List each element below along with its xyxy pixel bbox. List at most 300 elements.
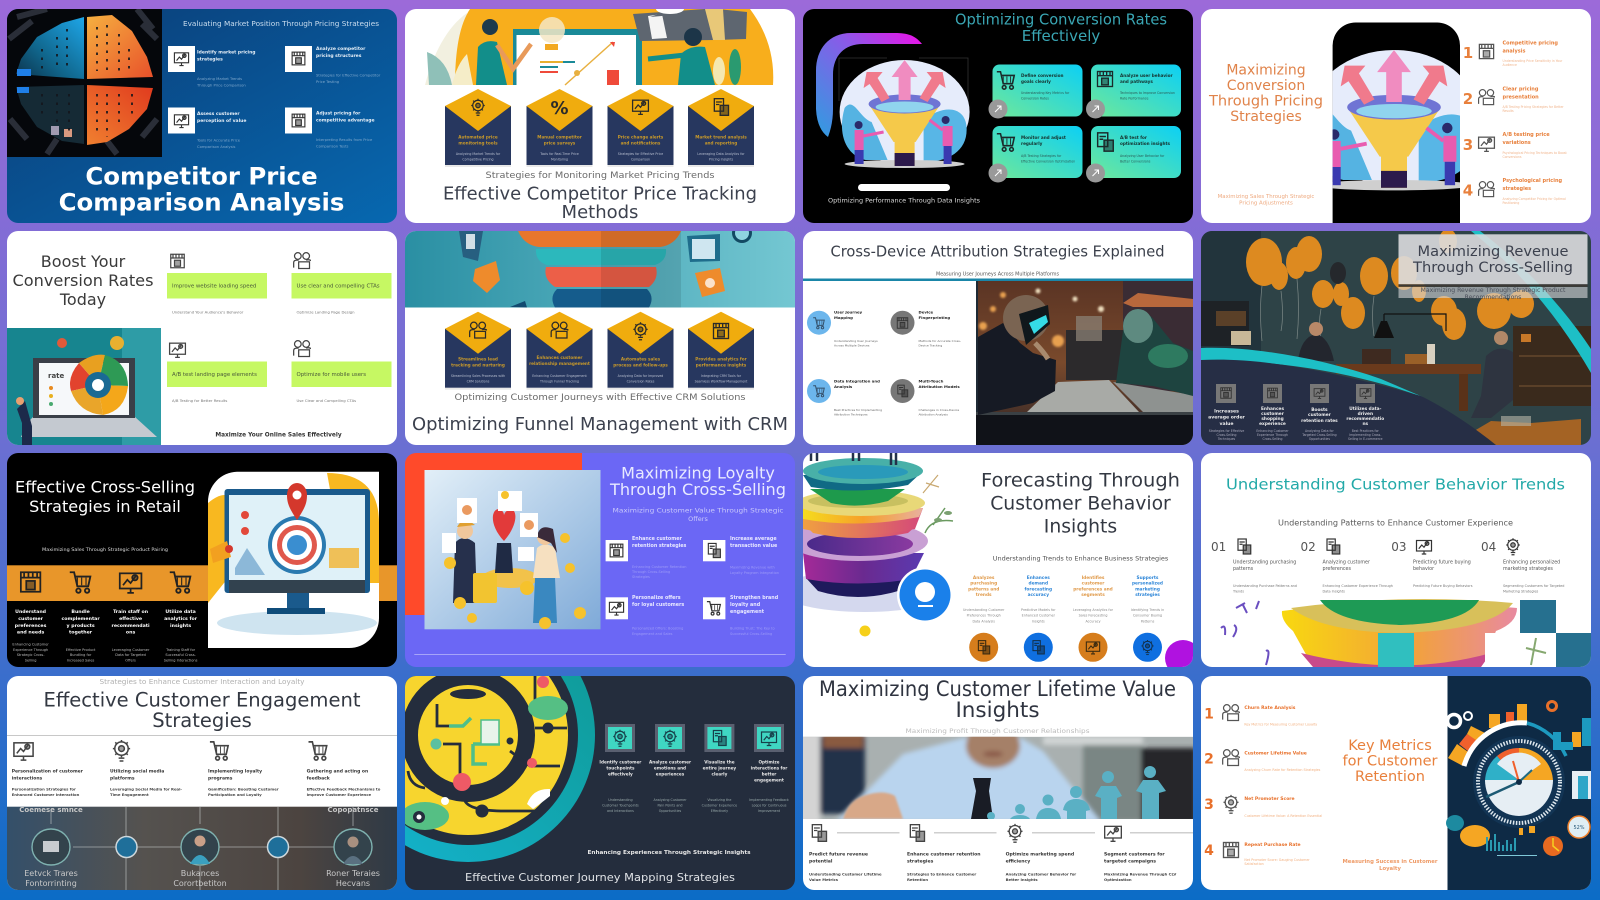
step: Analyze customer emotions and experiences <box>649 724 692 813</box>
metric 3: Net Promoter Score: 3 <box>1204 797 1214 813</box>
item: Enhance customer retention strategies: Strategies <box>632 575 650 579</box>
metric 1: Churn Rate Analysis: Key Metrics for Measuring Customer Loyalty <box>1244 722 1317 726</box>
panel: Effective Customer Engagement Strategies <box>7 676 397 890</box>
title: Strategies <box>152 709 252 732</box>
title: Through Cross-Selling <box>609 480 786 499</box>
column: Supports personalized marketing strategies: marketing <box>1135 586 1160 592</box>
tile: Define conversion goals clearly: goals clearly <box>1021 79 1051 84</box>
step: Utilize data analytics for insights <box>164 572 198 662</box>
item: Increases average order value: Techniques <box>1217 437 1235 441</box>
item: User Journey Mapping: Understanding User Journeys <box>834 339 878 343</box>
step: Utilize data analytics for insights: Training Staff for <box>165 648 196 652</box>
item: Increases average order value: average order <box>1208 414 1246 420</box>
icon card: Price change alerts and notifications: Price change alerts <box>618 134 664 140</box>
step: Bundle complementary products together <box>62 572 100 662</box>
step: Identify customer touchpoints effectively: touchpoints <box>606 766 635 770</box>
step: Optimize interactions for better engagement: Optimize <box>758 760 780 764</box>
caption: Optimizing Performance Through Data Insights <box>828 198 980 204</box>
footer caption: Maximize Your Online Sales Effectively <box>215 432 342 438</box>
item: A/B test landing page elements: A/B test landing page elements <box>172 372 257 378</box>
item: Strengthen brand loyalty and engagement: Building Trust: The Key to <box>730 626 775 630</box>
item: Enhance customer retention strategies: strategies <box>907 858 934 864</box>
step: Optimize interactions for better engagement <box>749 724 789 813</box>
item: Device Fingerprinting: Fingerprinting <box>918 315 950 320</box>
image: connected customer network diagram: Corortbetiton <box>173 879 227 888</box>
icon card: Manual competitor price surveys: price surveys <box>544 140 576 146</box>
panel: Effective Competitor Price Tracking Methods <box>405 4 795 223</box>
icon card: Manual competitor price surveys: Manual competitor <box>537 134 583 140</box>
icon card: Enhances customer relationship management: Through Funnel Tracking <box>539 380 579 384</box>
step: Visualize the entire journey clearly: Visualize the <box>704 760 735 764</box>
teal corner curve <box>1471 231 1591 373</box>
item: Enhance customer retention strategies: retention strategies <box>632 543 687 549</box>
icon card: Market trend analysis and reporting: Leveraging Data Analytics for <box>697 152 745 156</box>
item 3: A/B testing price variations: 3 <box>1463 136 1473 154</box>
step: Visualize the entire journey clearly <box>702 724 737 813</box>
item: Enhances customer shopping experience: experience <box>1259 421 1286 427</box>
column: Identifies customer preferences and segments: Identifies <box>1082 575 1105 581</box>
icon card: Manual competitor price surveys: Monitoring <box>551 158 568 162</box>
step: Bundle complementary products together: together <box>69 630 93 636</box>
item: Personalization of customer interactions <box>12 743 84 797</box>
item: Boosts customer retention rates: Analyzing Data for <box>1305 429 1334 433</box>
step: Utilize data analytics for insights: Utilize data <box>165 609 196 615</box>
item: Utilizes data-driven recommendations: Implementing Cross- <box>1349 433 1381 437</box>
icon card: Automates sales process and follow-ups: Conversion Rates <box>627 380 655 384</box>
item: Use clear and compelling CTAs: Use clear and compelling CTAs <box>296 284 380 290</box>
caption: Loyalty <box>1379 866 1401 872</box>
step 01 <box>1211 539 1297 594</box>
step 04: Segmenting Customers for Targeted <box>1503 584 1564 588</box>
item: Predict future revenue potential: potential <box>809 858 833 864</box>
column: Supports personalized marketing strategies <box>1131 575 1164 662</box>
item: Optimize marketing spend efficiency: Optimize marketing spend <box>1006 852 1074 858</box>
item: Implementing loyalty programs: Participation and Loyalty <box>208 792 262 797</box>
item: Increases average order value <box>1208 384 1246 441</box>
item: Assess customer perception of value: Comparison Analysis <box>197 145 236 149</box>
item: Multi-Touch Attribution Models: Challenges in Cross-Device <box>918 408 959 412</box>
icon card: Streamlines lead tracking and nurturing <box>445 312 511 390</box>
title: Key Metrics <box>1348 738 1432 754</box>
title: Conversion Rates <box>12 271 154 290</box>
illustration: circular journey map <box>341 608 595 862</box>
item: Assess customer perception of value <box>168 108 246 149</box>
tile: Monitor and adjust regularly: Effective Conversion Optimization <box>1021 160 1075 164</box>
item: Multi-Touch Attribution Models: Attribution Models <box>918 384 960 389</box>
step 02 <box>1300 539 1393 594</box>
subtitle: Measuring User Journeys Across Multiple Platforms <box>936 272 1059 278</box>
item 4: Psychological pricing strategies: Analyzing Competitor Pricing for Optimal <box>1502 197 1566 201</box>
item: Increases average order value: Increases <box>1214 408 1239 414</box>
item: Utilizing social media platforms <box>110 740 182 797</box>
step: Bundle complementary products together: y products <box>67 623 95 629</box>
item 2: Clear pricing presentation: Results <box>1502 109 1514 113</box>
image: businessman with rising chalk figures <box>798 724 1196 824</box>
item: Multi-Touch Attribution Models: Attribution Analysis <box>918 412 948 416</box>
step: Understand customer preferences and needs: preferences <box>15 623 47 629</box>
column: Enhances demand forecasting accuracy: demand <box>1029 580 1048 586</box>
step 04: Enhancing personalized <box>1503 560 1560 566</box>
item: Gathering and acting on feedback: feedback <box>307 776 331 782</box>
item: Optimize for mobile users <box>292 341 392 403</box>
panel: Key Metrics for Customer Retention <box>1201 676 1591 890</box>
icon card: Provides analytics for performance insights: performance insights <box>696 362 747 368</box>
item: Optimize for mobile users: Use Clear and Compelling CTAs <box>296 398 356 403</box>
item: Implementing loyalty programs <box>208 742 279 797</box>
step: Train staff on effective recommendations: Train staff on <box>113 609 148 615</box>
step: Utilize data analytics for insights: analytics for <box>164 616 198 622</box>
item: Enhance customer retention strategies: Through Cross-Selling <box>631 570 670 574</box>
icon card: Automates sales process and follow-ups <box>608 312 674 390</box>
item: User Journey Mapping: Mapping <box>834 315 853 320</box>
metric 3: Net Promoter Score: Customer Lifetime Value: A Retention Essential <box>1244 814 1322 818</box>
step 01: 01 <box>1211 540 1226 554</box>
step 01: Understanding Purchase Patterns and <box>1233 584 1297 588</box>
item: Personalization of customer interactions: Enhanced Customer Interaction <box>12 792 80 797</box>
metric 4: Repeat Purchase Rate: 4 <box>1204 843 1214 859</box>
item: Analyze competitor pricing structures: Price Testing <box>316 80 339 84</box>
panel: Optimizing Funnel Management with CRM <box>405 223 795 445</box>
swoosh decoration <box>816 33 922 137</box>
image: connected customer network diagram: Eetvck Trares <box>24 869 78 878</box>
divider <box>7 734 397 737</box>
title: Insights <box>955 698 1040 723</box>
panel: Competitor Price Comparison Analysis <box>7 9 397 223</box>
item 1: Competitive pricing analysis: Audience <box>1502 63 1517 67</box>
column: Analyzes purchasing patterns and trends: Preferences Through <box>967 614 1001 618</box>
item: Utilizing social media platforms: Leveraging Social Media for Real- <box>110 786 182 792</box>
step: Visualize the entire journey clearly: entire journey <box>703 766 736 770</box>
metric 3: Net Promoter Score <box>1204 795 1322 818</box>
item: Segment customers for targeted campaigns: targeted campaigns <box>1104 858 1156 864</box>
item: Increases average order value: Strategies for Effective <box>1209 429 1244 433</box>
column: Enhances demand forecasting accuracy: forecasting <box>1025 586 1052 592</box>
column: Enhances demand forecasting accuracy: accuracy <box>1028 592 1049 598</box>
column: Supports personalized marketing strategies: Patterns <box>1141 620 1155 624</box>
item: Optimize for mobile users: Optimize for mobile users <box>296 372 366 378</box>
step: Understand customer preferences and needs: Enhancing Customer <box>12 642 49 646</box>
tile: Define conversion goals clearly <box>988 64 1082 118</box>
item 3: A/B testing price variations: A/B testing price <box>1502 132 1550 138</box>
item 3: A/B testing price variations: Conversions <box>1502 155 1522 159</box>
title: Maximizing Customer Lifetime Value <box>819 677 1176 702</box>
icon card: Enhances customer relationship management: Enhances customer <box>536 355 583 360</box>
step: Analyze customer emotions and experiences: Analyze customer <box>649 760 692 764</box>
metric 2: Customer Lifetime Value: Analyzing Churn Rate for Retention Strategies <box>1244 768 1321 772</box>
step 04: marketing strategies <box>1503 566 1553 572</box>
item: Device Fingerprinting <box>890 310 961 348</box>
step: Understand customer preferences and needs <box>12 572 49 662</box>
item: Gathering and acting on feedback: Effective Feedback Mechanisms to <box>307 786 381 792</box>
step 04: 04 <box>1481 540 1496 554</box>
item: Device Fingerprinting: Device <box>918 310 934 314</box>
white bar <box>858 184 950 191</box>
icon card: Automates sales process and follow-ups: Analyzing Data for Improved <box>618 374 663 378</box>
image: curved dark bottom panel <box>1201 360 1496 445</box>
item: Personalize offers for loyal customers <box>606 595 684 636</box>
title box: Recommendations <box>1465 294 1521 301</box>
column: Supports personalized marketing strategies: Consumer Buying <box>1133 614 1162 618</box>
bottom rule <box>414 653 786 656</box>
item: Optimize marketing spend efficiency: efficiency <box>1006 858 1030 864</box>
column: Identifies customer preferences and segments: customer <box>1082 580 1105 586</box>
item: Strengthen brand loyalty and engagement: Successful Cross-Selling <box>730 632 772 636</box>
step: Identify customer touchpoints effectively: Customer Touchpoints <box>602 804 639 808</box>
column: Supports personalized marketing strategies: personalized <box>1132 580 1163 586</box>
step: Visualize the entire journey clearly: clearly <box>711 772 728 776</box>
title: Effective Competitor Price Tracking <box>443 184 757 204</box>
item 2: Clear pricing presentation <box>1463 86 1564 113</box>
item: Strengthen brand loyalty and engagement <box>703 595 779 636</box>
title box: Maximizing Revenue <box>1418 243 1568 260</box>
item: Gathering and acting on feedback <box>307 742 381 797</box>
item: Multi-Touch Attribution Models <box>890 378 960 416</box>
icon: blue globe badge <box>897 567 953 623</box>
item 1: Competitive pricing analysis: 1 <box>1463 44 1473 62</box>
icon card: Streamlines lead tracking and nurturing: tracking and nurturing <box>451 362 505 368</box>
image: funnel close-up with colour squares <box>1221 599 1591 667</box>
icon card: Price change alerts and notifications: and notifications <box>621 140 661 146</box>
item: Utilizing social media platforms: platforms <box>110 776 135 782</box>
image: funnel on black panel <box>1332 22 1460 223</box>
item: Boosts customer retention rates <box>1301 384 1338 441</box>
item: Boosts customer retention rates: Targeted Cross-Selling <box>1301 433 1337 437</box>
item: Enhances customer shopping experience: Cross-Selling <box>1263 437 1283 441</box>
title: Today <box>59 290 106 309</box>
item: Analyze competitor pricing structures: Analyze competitor <box>316 46 366 52</box>
step 02: preferences <box>1322 566 1351 572</box>
icon card: Market trend analysis and reporting: Pricing Insights <box>709 158 733 162</box>
icon card: Market trend analysis and reporting <box>688 89 754 167</box>
side window <box>1572 771 1591 799</box>
step: Utilize data analytics for insights: insights <box>170 623 191 629</box>
item: Enhance customer retention strategies: Enhance customer retention <box>907 852 980 858</box>
metric 2: Customer Lifetime Value: 2 <box>1204 752 1214 768</box>
item: Increase average transaction value: Loyalty Program Integration <box>730 571 779 575</box>
item: Increases average order value: value <box>1219 421 1234 427</box>
accent rule <box>803 278 1193 281</box>
item: Adjust pricing for competitive advantage: Interpreting Results from Price <box>316 138 373 142</box>
title: Effective Cross-Selling <box>15 478 195 496</box>
tile: A/B test for optimization insights <box>1086 126 1181 182</box>
step: Analyze customer emotions and experiences: experiences <box>656 772 685 776</box>
icon card: Market trend analysis and reporting: and reporting <box>705 140 737 146</box>
item: Data Integration and Analysis: Analysis <box>834 384 853 389</box>
metric 4: Repeat Purchase Rate <box>1204 842 1310 866</box>
metric 4: Repeat Purchase Rate: Net Promoter Score: Gauging Customer <box>1244 858 1310 862</box>
image: connected customer network diagram: Fontorrinting <box>25 879 77 888</box>
item: Utilizes data-driven recommendations: Selling in E-commerce <box>1348 437 1383 441</box>
subtitle: Maximizing Customer Value Through Strategic <box>612 506 784 514</box>
yellow dot <box>860 626 870 636</box>
subtitle: Understanding Trends to Enhance Business Strategies <box>993 556 1168 562</box>
tile: A/B test for optimization insights: A/B test for <box>1120 135 1148 140</box>
metric 1: Churn Rate Analysis: Churn Rate Analysis <box>1244 705 1296 711</box>
step: Analyze customer emotions and experiences: Analyzing Customer <box>653 798 687 802</box>
item 2: Clear pricing presentation: presentation <box>1502 94 1539 100</box>
column: Identifies customer preferences and segments: Leveraging Analytics for <box>1073 608 1114 612</box>
step: Train staff on effective recommendations: Leveraging Customer <box>112 648 150 652</box>
image: layered funnel banner <box>405 223 795 308</box>
panel: Boost Your Conversion Rates Today <box>7 231 397 445</box>
icon card: Manual competitor price surveys: % <box>550 98 569 119</box>
item: Enhance customer retention strategies: Enhancing Customer Retention <box>632 565 686 569</box>
title: Retention <box>1355 769 1425 785</box>
item: Utilizes data-driven recommendations <box>1346 384 1384 441</box>
item: Boosts customer retention rates: retention rates <box>1301 418 1338 424</box>
step: Optimize interactions for better engagement: Improvement <box>758 809 781 813</box>
tile: Monitor and adjust regularly: Monitor and adjust <box>1021 135 1066 140</box>
item: Identify market pricing strategies: Through Price Comparison <box>196 84 246 88</box>
item: Optimize marketing spend efficiency: Analyzing Customer Behavior for <box>1006 872 1076 876</box>
title: Customer Behavior <box>990 494 1171 514</box>
item: Personalize offers for loyal customers: Engagement and Sales <box>632 632 673 636</box>
item: Utilizes data-driven recommendations: recommendatio <box>1346 416 1384 422</box>
title: Conversion <box>1227 78 1305 94</box>
metric 2: Customer Lifetime Value <box>1204 750 1321 772</box>
tile: A/B test for optimization insights: Better Conversions <box>1120 160 1151 164</box>
step: Visualize the entire journey clearly: Effectively <box>711 809 728 813</box>
icon card: Provides analytics for performance insights <box>688 312 754 390</box>
item: Personalization of customer interactions: Personalization Strategies for <box>12 786 76 792</box>
item: User Journey Mapping: User Journey <box>834 310 863 314</box>
item 1: Competitive pricing analysis <box>1463 40 1563 67</box>
image: connected customer network diagram: Roner Teraies <box>326 869 380 878</box>
tile: Monitor and adjust regularly: A/B Testing Strategies for <box>1021 154 1062 158</box>
icon card: Enhances customer relationship management: relationship management <box>529 361 590 366</box>
icon card: Enhances customer relationship management: Enhancing Customer Engagement <box>532 374 588 378</box>
item 2: Clear pricing presentation: A/B Testing Pricing Strategies for Better <box>1502 105 1564 109</box>
item: Device Fingerprinting: Methods for Accurate Cross- <box>918 339 961 343</box>
icon card: Market trend analysis and reporting: Market trend analysis <box>695 134 747 140</box>
icon card: Streamlines lead tracking and nurturing: Streamlining Sales Processes with <box>451 374 505 378</box>
metric 4: Repeat Purchase Rate: Satisfaction <box>1244 862 1264 866</box>
step 01: patterns <box>1233 566 1254 572</box>
item: Data Integration and Analysis: Attribution Techniques <box>834 412 868 416</box>
column: Supports personalized marketing strategies: strategies <box>1135 592 1160 598</box>
footer caption: Enhancing Experiences Through Strategic Insights <box>588 850 750 856</box>
Decorative bars <box>1489 704 1581 747</box>
title: Boost Your <box>41 252 126 271</box>
illustration: stacked funnel tiers <box>780 453 953 612</box>
image: connected customer network diagram: Coemese smnce <box>19 806 83 814</box>
icon card: Provides analytics for performance insights: Provides analytics for <box>695 356 748 362</box>
step 04: Marketing Strategies <box>1503 590 1539 594</box>
step 02: 02 <box>1300 540 1316 554</box>
step: Train staff on effective recommendations: Data for Targeted <box>115 653 146 657</box>
item: Enhances customer shopping experience: Experience Through <box>1257 433 1288 437</box>
item: Predict future revenue potential <box>809 825 900 882</box>
icon card: Streamlines lead tracking and nurturing: CRM Solutions <box>467 380 490 384</box>
item: Predict future revenue potential: Predict future revenue <box>809 852 868 858</box>
item: Enhances customer shopping experience: shopping <box>1261 416 1284 422</box>
icon card: Price change alerts and notifications: Strategies for Effective Price <box>618 152 663 156</box>
item: Analyze competitor pricing structures <box>285 46 381 84</box>
title box: Through Cross-Selling <box>1412 259 1573 276</box>
title: Insights <box>1044 516 1117 538</box>
item: Optimize marketing spend efficiency: Better Insights <box>1006 877 1038 882</box>
column: Identifies customer preferences and segments: preferences and <box>1073 586 1113 592</box>
column: Analyzes purchasing patterns and trends: Data Analysis <box>972 620 995 624</box>
item: Implementing loyalty programs: Gamification: Boosting Customer <box>208 786 279 792</box>
subtitle: Optimizing Customer Journeys with Effective CRM Solutions <box>454 393 746 403</box>
column: Enhances demand forecasting accuracy: Enhanced Customer <box>1022 614 1056 618</box>
item: Strengthen brand loyalty and engagement: loyalty and <box>730 602 761 608</box>
item: Increase average transaction value <box>703 536 779 575</box>
step 04 <box>1481 538 1564 594</box>
item: Optimize marketing spend efficiency <box>1006 824 1095 882</box>
icon card: Automated price monitoring tools: Analyzing Market Trends for <box>456 152 501 156</box>
metric 2: Customer Lifetime Value: Customer Lifetime Value <box>1244 750 1307 756</box>
icon card: Price change alerts and notifications: Comparison <box>631 158 650 162</box>
item: Increase average transaction value: Maximizing Revenue with <box>730 566 775 570</box>
step: Train staff on effective recommendations: effective <box>119 616 142 622</box>
panel: Maximizing Revenue Through Cross-Selling <box>1201 229 1591 445</box>
item: Enhance customer retention strategies: Strategies to Enhance Customer <box>907 872 976 876</box>
tile: Define conversion goals clearly: Conversion Rates <box>1021 96 1049 100</box>
step: Optimize interactions for better engagement: Implementing Feedback <box>749 798 789 802</box>
item: Strengthen brand loyalty and engagement: engagement <box>730 609 765 615</box>
image: connected customer network diagram: Hecvans <box>336 879 370 888</box>
item: Data Integration and Analysis: Data Integration and <box>834 378 880 384</box>
panel: Effective Cross-Selling Strategies in Retail <box>7 453 397 667</box>
step: Analyze customer emotions and experiences: emotions and <box>654 766 686 770</box>
tile: A/B test for optimization insights: Analyzing User Behavior for <box>1120 154 1165 158</box>
image: laptop with conversion rate pie <box>7 328 161 445</box>
step: Analyze customer emotions and experiences: Opportunities <box>659 809 682 813</box>
item: Enhance customer retention strategies: Retention <box>907 877 928 882</box>
item: Identify market pricing strategies: Analyzing Market Trends <box>197 77 242 81</box>
column: Enhances demand forecasting accuracy <box>1021 575 1056 662</box>
subtitle: Offers <box>688 515 708 523</box>
step: Optimize interactions for better engagement: Loops for Continuous <box>752 804 787 808</box>
tile: Monitor and adjust regularly: regularly <box>1021 141 1043 146</box>
step: Train staff on effective recommendations: ons <box>126 631 135 636</box>
step: Identify customer touchpoints effectively: Identify customer <box>599 760 642 764</box>
metric 1: Churn Rate Analysis <box>1204 705 1317 726</box>
item 4: Psychological pricing strategies: strategies <box>1502 186 1531 192</box>
title box <box>1398 234 1588 301</box>
item: Boosts customer retention rates: Boosts <box>1311 407 1328 413</box>
title: Effectively <box>1022 27 1100 45</box>
icon card: Streamlines lead tracking and nurturing: Streamlines lead <box>458 356 498 362</box>
gears <box>1448 714 1460 728</box>
item: Increases average order value: Cross-Selling <box>1217 433 1237 437</box>
image: meeting room with orange balloons <box>1201 229 1591 445</box>
image: monitor with target and map pin <box>208 471 379 649</box>
item: Assess customer perception of value: Assess customer <box>197 111 240 117</box>
item 2: Clear pricing presentation: 2 <box>1463 90 1473 108</box>
tile: Analyze user behavior and pathways <box>1086 64 1181 118</box>
title: Effective Customer Engagement <box>44 688 361 712</box>
step: Understand customer preferences and needs: Understand <box>15 609 46 615</box>
column: Supports personalized marketing strategies: Supports <box>1136 575 1159 581</box>
item: Adjust pricing for competitive advantage: competitive advantage <box>316 118 375 124</box>
item: Enhances customer shopping experience: Enhancing Customer <box>1256 429 1289 433</box>
panel: Understanding Customer Behavior Trends <box>1201 453 1591 667</box>
title: Maximizing <box>1226 62 1306 78</box>
item 4: Psychological pricing strategies: Positioning <box>1502 201 1519 205</box>
image: team with telescope and chart <box>425 4 773 85</box>
gauge ring <box>1464 723 1527 766</box>
teal accent ribbon <box>1201 348 1423 397</box>
panel: Forecasting Through Customer Behavior Insights <box>780 453 1201 676</box>
column: Enhances demand forecasting accuracy: Insights <box>1032 620 1045 624</box>
item 4: Psychological pricing strategies: Psychological pricing <box>1502 178 1563 184</box>
column: Supports personalized marketing strategies: Identifying Trends in <box>1131 608 1164 612</box>
tile: Analyze user behavior and pathways: Techniques to Improve Conversion <box>1119 91 1175 95</box>
column: Enhances demand forecasting accuracy: Predictive Models for <box>1021 608 1056 612</box>
